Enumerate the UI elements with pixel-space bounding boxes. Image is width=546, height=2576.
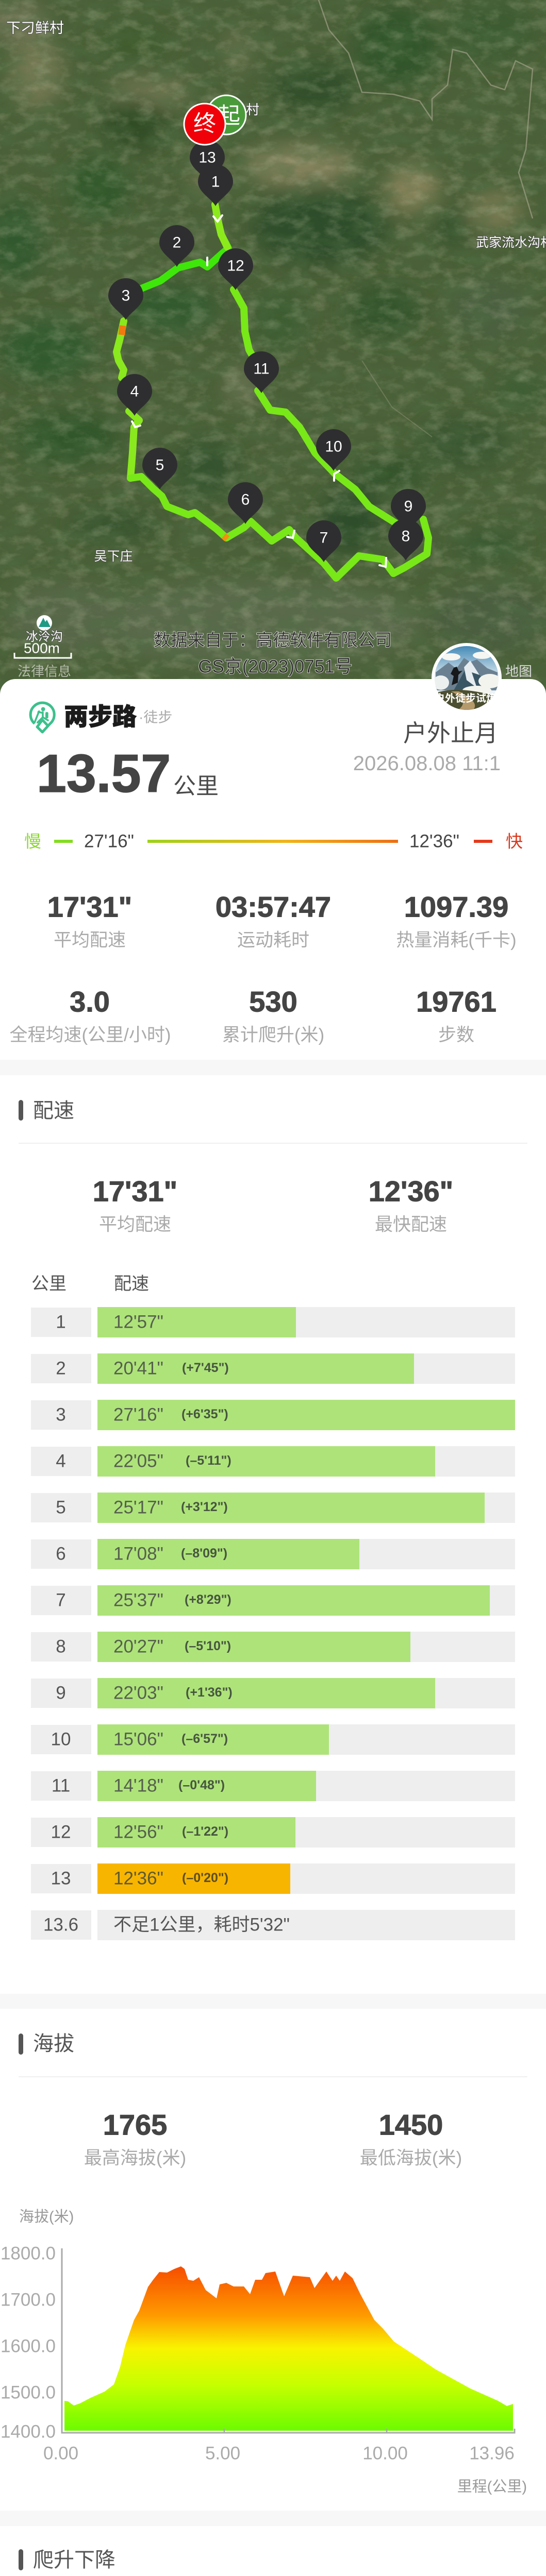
row km 12	[31, 1817, 515, 1848]
elevation area	[64, 2266, 513, 2431]
y axis labels: 1500.0	[1, 2382, 56, 2403]
row km 9	[31, 1678, 515, 1708]
summary card	[0, 643, 546, 1060]
x axis labels: 里程(公里)	[457, 2479, 527, 2495]
map attribution: GS京(2023)0751号	[198, 656, 353, 677]
pin 7	[306, 520, 341, 562]
fastest pace: 12'36"	[369, 1175, 453, 1208]
highest elevation: 1765	[103, 2108, 167, 2141]
stat: moving time: 03:57:47	[216, 890, 331, 923]
pin 1: 1	[211, 173, 220, 191]
pace legend	[24, 832, 523, 851]
logo: 两步路 徒步	[30, 703, 172, 732]
row km 9: (+1'36")	[186, 1685, 233, 1700]
row km 13.6: 不足1公里，耗时5'32"	[113, 1914, 290, 1935]
row km 7: 25'37"	[113, 1590, 163, 1611]
pin 10: 10	[325, 438, 342, 455]
pin 4	[117, 374, 152, 416]
date: 2026.08.08 11:1	[353, 752, 501, 775]
table header: 公里	[31, 1274, 67, 1294]
row km 6: (–8'09")	[181, 1546, 227, 1561]
row km 13: 12'36"	[113, 1868, 163, 1889]
pin 13: 13	[198, 149, 216, 166]
fastest pace	[369, 1175, 453, 1234]
row km 4: (–5'11")	[186, 1453, 231, 1468]
map scale	[14, 640, 71, 658]
row km 7	[31, 1585, 515, 1616]
elevation chart: 海拔(米)	[19, 2208, 74, 2225]
row km 5: 5	[56, 1497, 66, 1518]
row km 10: (–6'57")	[181, 1732, 228, 1746]
row km 11: (–0'48")	[178, 1778, 225, 1792]
row km 3: (+6'35")	[181, 1407, 228, 1421]
row km 13.6: 13.6	[43, 1914, 78, 1935]
row km 8: (–5'10")	[185, 1639, 231, 1653]
start marker: 起	[218, 103, 240, 129]
row km 1: 1	[56, 1312, 66, 1332]
pin 6	[228, 482, 263, 524]
table header: 配速	[114, 1274, 149, 1294]
x axis labels	[43, 2443, 527, 2495]
row km 3: 3	[56, 1404, 66, 1425]
x axis labels: 10.00	[362, 2443, 408, 2464]
y axis labels: 1800.0	[1, 2243, 56, 2264]
map scale: 500m	[24, 640, 60, 656]
row km 1	[31, 1307, 515, 1337]
pin 12	[218, 248, 253, 290]
row km 12: (–1'22")	[182, 1824, 228, 1839]
pin 9: 9	[404, 498, 412, 515]
row km 5	[31, 1493, 515, 1523]
panel: elevation	[1, 2032, 527, 2495]
stat: steps	[416, 985, 497, 1045]
stat: steps: 19761	[416, 985, 497, 1018]
pin 1	[198, 164, 233, 206]
lowest elevation: 最低海拔(米)	[360, 2148, 462, 2168]
satellite map	[0, 0, 546, 701]
row km 4	[31, 1446, 515, 1477]
map attribution: 数据来自于：高德软件有限公司	[154, 631, 392, 649]
highest elevation: 最高海拔(米)	[84, 2148, 186, 2168]
map place labels	[6, 20, 546, 564]
row km 11	[31, 1771, 515, 1801]
stat: average pace: 平均配速	[54, 930, 126, 950]
stat: calories: 热量消耗(千卡)	[396, 930, 517, 950]
row km 5: (+3'12")	[181, 1500, 228, 1514]
row km 5: 25'17"	[113, 1497, 163, 1518]
icon: scenic spot 冰泠沟: 冰泠沟	[26, 630, 63, 644]
heading: elevation: 海拔	[33, 2032, 74, 2055]
map attribution: 地图	[505, 664, 532, 679]
pin 2	[159, 225, 194, 267]
pin 9	[391, 489, 426, 531]
user name: 户外止月	[403, 720, 498, 747]
map attribution	[154, 631, 532, 679]
stat: calories	[396, 890, 517, 950]
pin 10	[316, 429, 351, 471]
pin 7: 7	[320, 530, 328, 546]
pin 11	[244, 351, 279, 393]
logo: 两步路 徒步: ·徒步	[139, 709, 172, 725]
x axis labels: 13.96	[469, 2443, 515, 2464]
stat: moving time: 运动耗时	[237, 930, 309, 950]
avatar	[432, 643, 502, 713]
map pins: kilometre markers	[108, 140, 426, 562]
pin 8: 8	[402, 528, 410, 545]
pin 3	[108, 278, 143, 320]
lowest elevation: 1450	[379, 2108, 443, 2141]
row km 9: 9	[56, 1683, 66, 1703]
row km 13.6	[31, 1910, 515, 1940]
row km 10: 15'06"	[113, 1729, 163, 1750]
row km 10	[31, 1724, 515, 1755]
stat: average pace: 17'31"	[47, 890, 132, 923]
row km 10: 10	[51, 1729, 71, 1750]
row km 2: 20'41"	[113, 1358, 163, 1379]
row km 11: 14'18"	[113, 1775, 163, 1796]
row km 6: 17'08"	[113, 1544, 163, 1564]
pin 2: 2	[173, 234, 181, 251]
pace rows	[31, 1307, 515, 1940]
stat: average speed: 全程均速(公里/小时)	[9, 1025, 171, 1045]
y axis labels	[1, 2243, 56, 2442]
stat: steps: 步数	[438, 1025, 474, 1045]
highest elevation	[84, 2108, 186, 2168]
row km 12: 12	[51, 1822, 71, 1842]
pace legend: 快	[506, 832, 523, 851]
row km 13	[31, 1863, 515, 1894]
map place labels: 村	[246, 102, 259, 117]
total distance: 公里	[173, 774, 219, 799]
y axis labels: 1600.0	[1, 2336, 56, 2357]
end marker: 终	[193, 111, 216, 136]
stat: calories: 1097.39	[404, 890, 508, 923]
fastest pace: 最快配速	[375, 1215, 447, 1234]
row km 3	[31, 1400, 515, 1430]
y axis labels: 1400.0	[1, 2421, 56, 2442]
map place labels: 下刁鲜村	[6, 20, 64, 36]
total distance: 13.57	[37, 744, 171, 804]
row km 6	[31, 1539, 515, 1569]
row km 8: 8	[56, 1636, 66, 1657]
start marker	[207, 95, 246, 134]
pace legend: 27'16"	[84, 832, 134, 851]
row km 8: 20'27"	[113, 1636, 163, 1657]
row km 2	[31, 1353, 515, 1384]
legal link: 法律信息	[18, 664, 71, 679]
row km 13: 13	[51, 1868, 71, 1889]
row km 4: 4	[56, 1451, 66, 1471]
y axis labels: 1700.0	[1, 2290, 56, 2310]
heading: ascent descent: 爬升下降	[33, 2549, 115, 2571]
stat: moving time	[216, 890, 331, 950]
stat: total ascent: 累计爬升(米)	[222, 1025, 324, 1045]
pin 13	[190, 140, 225, 182]
x axis labels: 5.00	[205, 2443, 240, 2464]
row km 7: (+8'29")	[185, 1592, 231, 1607]
pin 5	[142, 448, 177, 489]
average pace: 17'31"	[93, 1175, 177, 1208]
row km 8	[31, 1632, 515, 1662]
table header	[31, 1274, 149, 1294]
row km 12: 12'56"	[113, 1822, 163, 1842]
average pace: 平均配速	[99, 1215, 171, 1234]
pin 5: 5	[156, 456, 164, 474]
pin 6: 6	[241, 492, 250, 508]
lowest elevation	[360, 2108, 462, 2168]
row km 7: 7	[56, 1590, 66, 1611]
x axis labels: 0.00	[43, 2443, 78, 2464]
end marker	[184, 104, 225, 145]
pin 8	[388, 519, 423, 561]
map place labels: 吴下庄	[94, 549, 133, 564]
stat: total ascent: 530	[249, 985, 297, 1018]
logo: 两步路 徒步: 两步路	[64, 703, 137, 731]
row km 4: 22'05"	[113, 1451, 163, 1471]
heading: pace: 配速	[33, 1099, 74, 1122]
route track	[117, 205, 428, 578]
panel: ascent and descent	[19, 2549, 541, 2576]
row km 11: 11	[52, 1775, 70, 1796]
pin 3: 3	[122, 287, 130, 304]
row km 9: 22'03"	[113, 1683, 163, 1703]
icon: scenic spot 冰泠沟	[26, 615, 63, 644]
row km 13: (–0'20")	[182, 1871, 228, 1885]
panel: pace	[19, 1099, 527, 1940]
row km 1: 12'57"	[113, 1312, 163, 1332]
pin 11: 11	[253, 361, 270, 377]
row km 2: (+7'45")	[182, 1361, 229, 1375]
stat: average speed	[9, 985, 171, 1045]
pace legend: 慢	[24, 832, 41, 851]
elevation chart	[1, 2208, 527, 2495]
avatar: 户外徒步试炼	[435, 692, 497, 704]
row km 2: 2	[56, 1358, 66, 1379]
pin 12: 12	[227, 258, 244, 274]
stat: average speed: 3.0	[70, 985, 110, 1018]
average pace	[93, 1175, 177, 1234]
stat: average pace	[47, 890, 132, 950]
pace legend: 12'36"	[409, 832, 459, 851]
stat: total ascent	[222, 985, 324, 1045]
pin 4: 4	[130, 383, 139, 400]
row km 3: 27'16"	[113, 1404, 163, 1425]
row km 6: 6	[56, 1544, 66, 1564]
